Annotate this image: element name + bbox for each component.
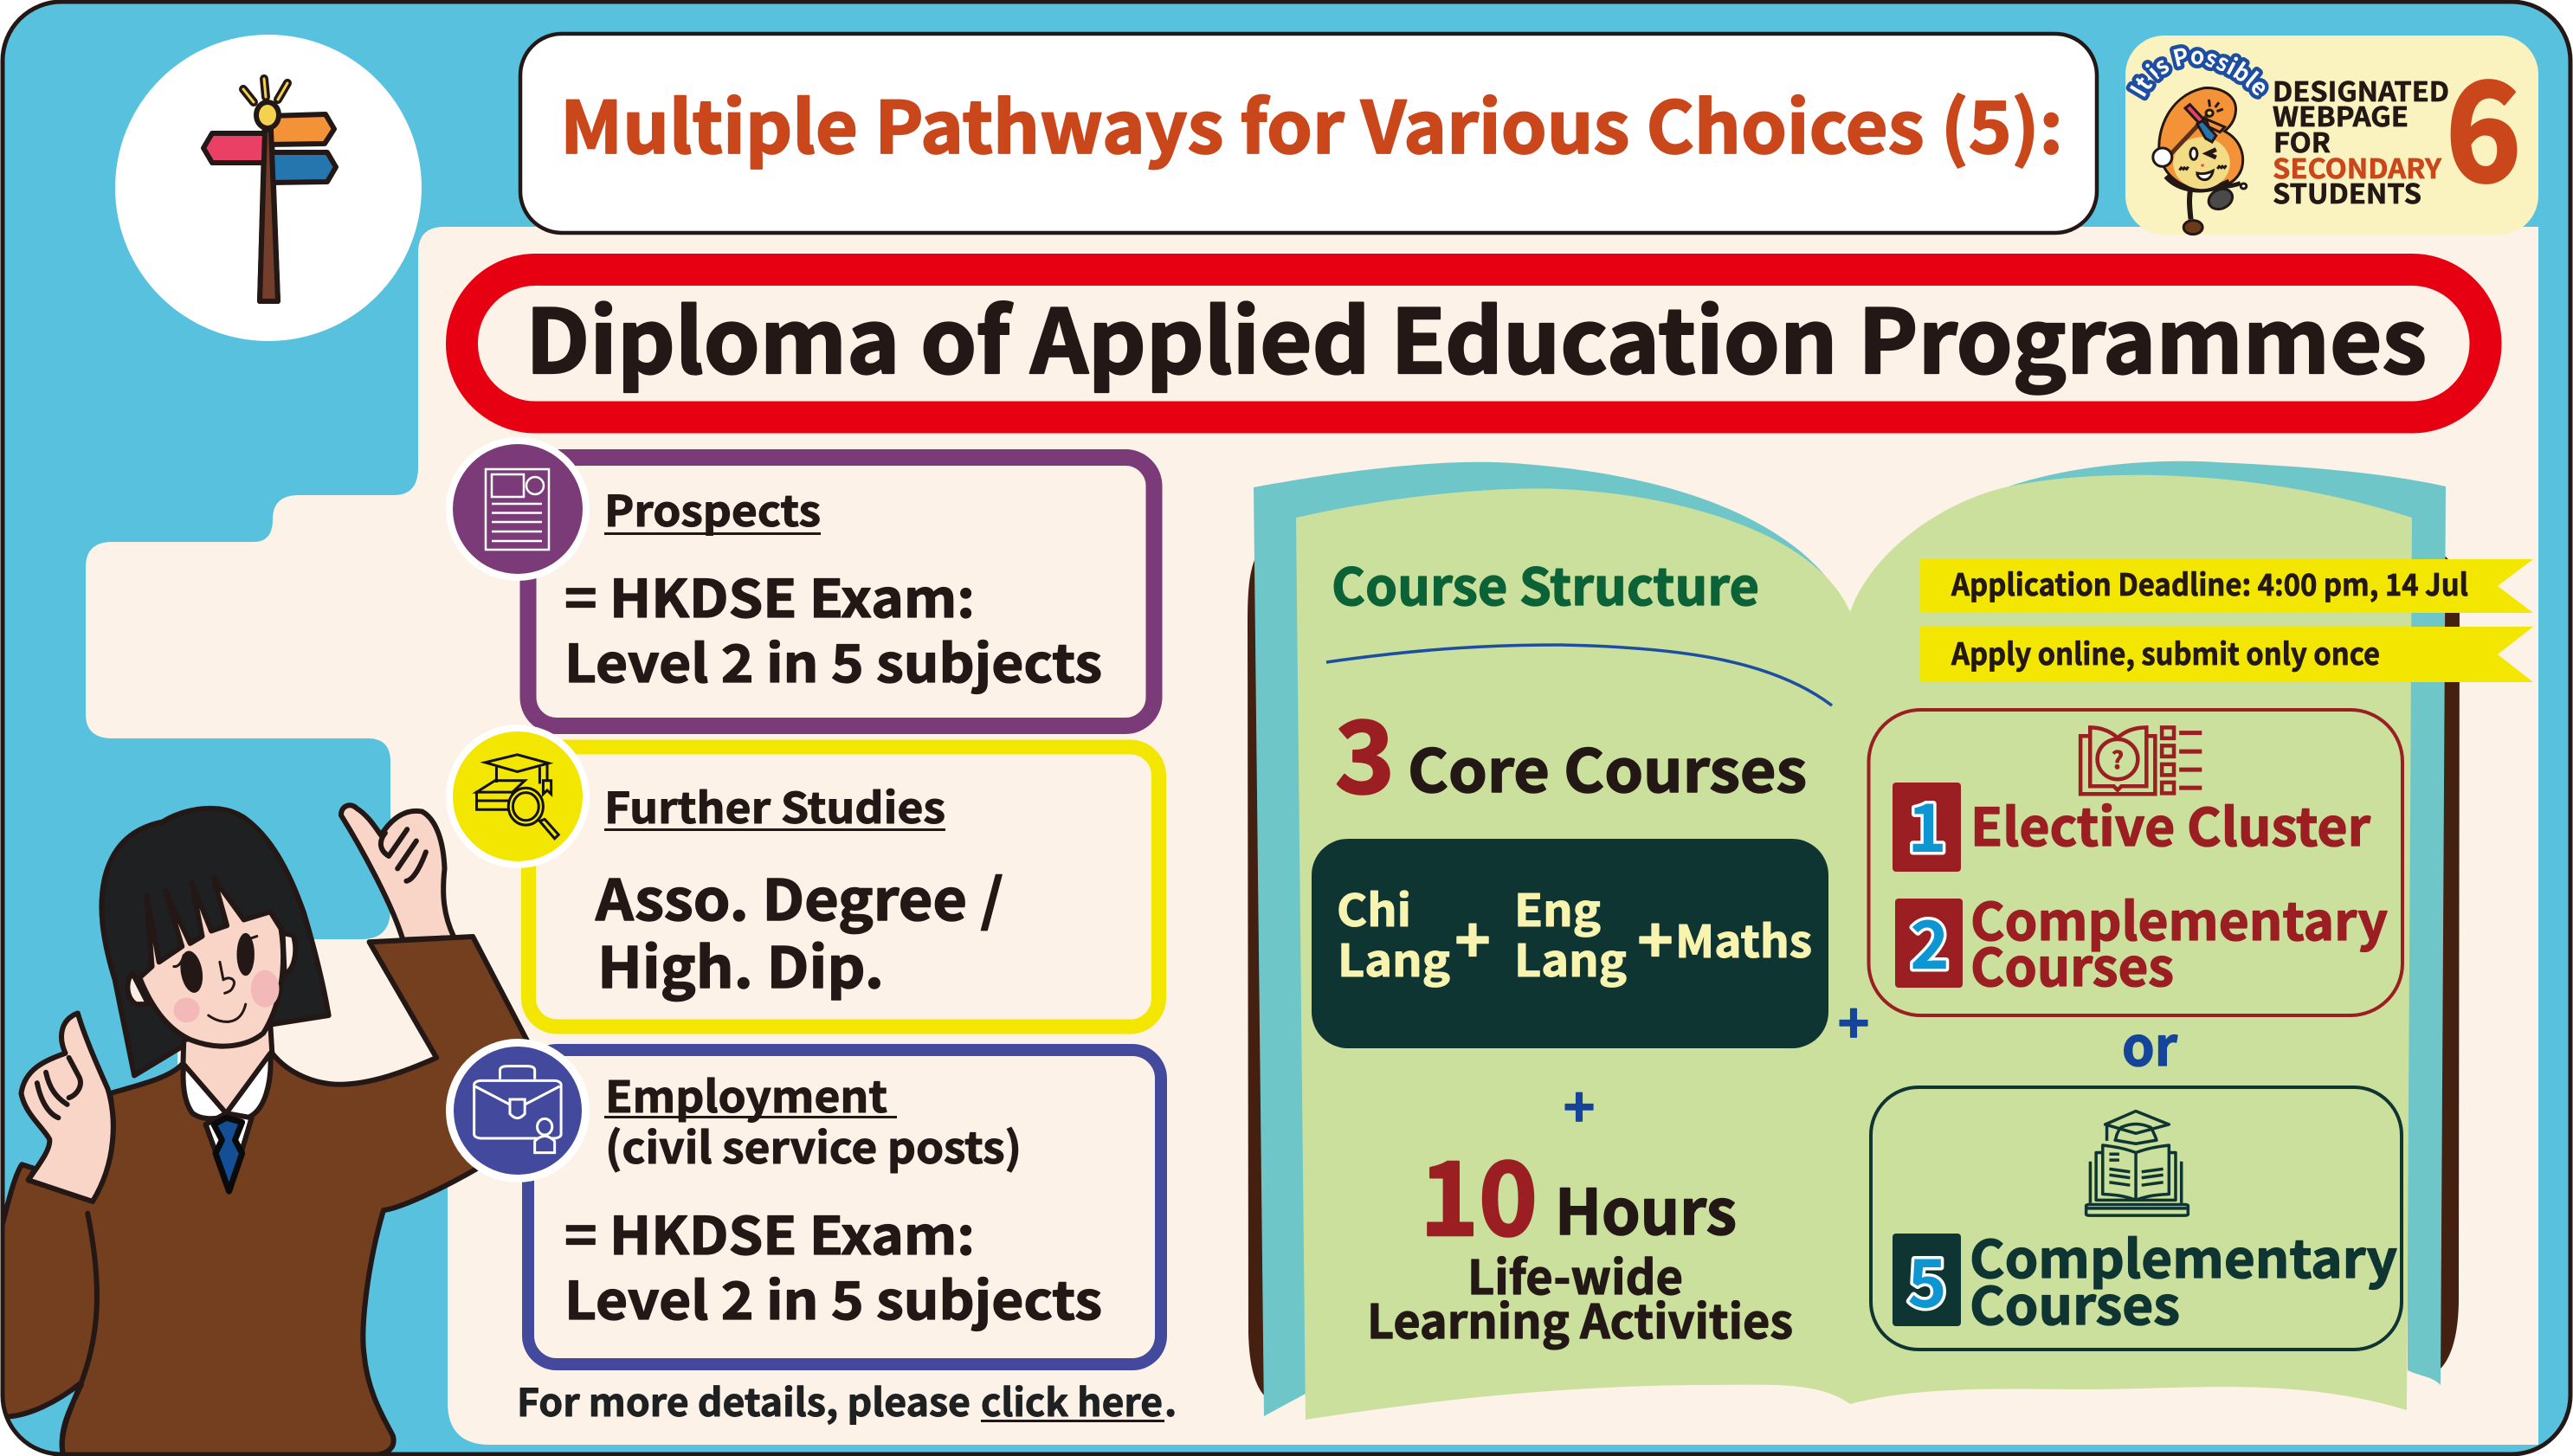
heading: course structure: Course Structure	[1332, 546, 1759, 620]
sleeve folds	[62, 1214, 97, 1455]
icon: graduation cap with magnifier	[446, 725, 590, 868]
badge text	[2273, 81, 2448, 204]
footer link note: click here	[981, 1372, 1163, 1427]
badge: two: 2	[1910, 892, 1950, 989]
heading: prospects: Prospects	[604, 478, 821, 539]
badge: five: 5	[1907, 1231, 1947, 1327]
webpage badge	[2125, 35, 2538, 235]
mascot	[2153, 87, 2247, 235]
icon: signpost in white circle	[115, 35, 422, 341]
complementary courses label	[1970, 1218, 2397, 1340]
core subjects panel	[1312, 839, 1828, 1048]
icon: document	[446, 437, 590, 581]
face and bangs	[139, 879, 283, 1047]
right hand thumb up	[341, 805, 455, 940]
further studies text: High. Dip.	[597, 923, 884, 1004]
badge: one: 1	[1907, 776, 1947, 872]
open book background	[1248, 461, 2460, 1420]
option one box	[1868, 710, 2402, 1015]
employment text: = HKDSE Exam:	[564, 1195, 975, 1270]
badge: one	[1893, 776, 1961, 872]
employment text	[564, 1195, 1102, 1335]
badge text: DESIGNATED	[2273, 70, 2449, 109]
blush	[173, 997, 200, 1022]
panel: further studies	[446, 725, 1158, 1027]
footer link note: For more details, please	[517, 1372, 971, 1427]
core courses heading: 3	[1335, 679, 1395, 822]
prospects text: Level 2 in 5 subjects	[564, 622, 1102, 698]
core subjects panel: Chi	[1337, 875, 1411, 939]
left hand fingers	[37, 1058, 81, 1118]
complementary courses label: Complementary	[1970, 1218, 2397, 1293]
prospects text	[566, 577, 1101, 694]
hair	[101, 809, 329, 1075]
badge: two	[1895, 892, 1963, 989]
core subjects panel: +	[1454, 893, 1491, 981]
core subjects panel: Lang	[1338, 925, 1450, 989]
eyes	[180, 950, 203, 993]
life-wide learning text: Learning Activities	[1367, 1284, 1793, 1352]
badge text: WEBPAGE	[2273, 95, 2409, 134]
complementary courses label	[1970, 880, 2388, 1002]
title box	[520, 34, 2097, 233]
heading: prospects	[604, 494, 821, 536]
curved divider	[1326, 645, 1832, 705]
ribbon: apply online	[1919, 627, 2533, 682]
footer link note: .	[1164, 1372, 1177, 1427]
icon: graduate with open book	[2086, 1111, 2188, 1215]
badge text: FOR	[2273, 121, 2331, 160]
option two box	[1871, 1087, 2402, 1350]
girl character	[0, 805, 537, 1455]
core courses heading	[1335, 679, 1807, 822]
panel: employment	[446, 1039, 1161, 1364]
collar	[184, 1053, 271, 1118]
further studies text	[595, 874, 1003, 1002]
main heading pill: Diploma of Applied Education Programmes	[526, 272, 2427, 399]
plus sign below: +	[1564, 1065, 1595, 1143]
prospects text: = HKDSE Exam:	[564, 557, 975, 633]
ribbon: apply online: Apply online, submit only once	[1951, 630, 2380, 674]
nose and mouth	[174, 937, 257, 1021]
further studies text: Asso. Degree /	[595, 855, 1003, 937]
core subjects panel: Eng	[1514, 875, 1601, 939]
sweater	[0, 937, 537, 1455]
mascot slogan: It is Possible	[2126, 44, 2269, 100]
ribbon: application deadline: Application Deadline: 4:00 pm, 14 Jul	[1951, 561, 2468, 605]
title box: Multiple Pathways for Various Choices (5):	[560, 70, 2063, 174]
core subjects panel: Maths	[1675, 906, 1812, 970]
icon: book with question mark and list: ?	[2112, 742, 2124, 776]
stepped cream content panel	[86, 227, 2538, 1445]
plus sign right: +	[1838, 981, 1869, 1059]
life-wide learning text: Life-wide	[1467, 1240, 1683, 1308]
core subjects panel: Lang	[1514, 925, 1627, 989]
heading: further studies	[604, 788, 945, 831]
left hand thumb up	[21, 1013, 113, 1202]
ears	[127, 933, 295, 1004]
footer link note	[517, 1372, 1177, 1427]
icon: briefcase	[446, 1039, 590, 1182]
employment text: Level 2 in 5 subjects	[564, 1260, 1102, 1335]
complementary courses label: Complementary	[1970, 880, 2388, 956]
icon: book with question mark and list	[2080, 727, 2202, 794]
panel: prospects	[446, 437, 1154, 725]
ten hours heading: Hours	[1555, 1162, 1737, 1253]
number six: 6	[2446, 23, 2521, 221]
life-wide learning text	[1367, 1240, 1793, 1352]
complementary courses label: Courses	[1970, 926, 2174, 1002]
complementary courses label: Courses	[1970, 1265, 2180, 1340]
or label: or	[2122, 1003, 2178, 1081]
right hand fingers	[381, 829, 426, 881]
heading: employment	[604, 1063, 1022, 1176]
ten hours heading: 10	[1420, 1117, 1538, 1265]
neck	[183, 1024, 272, 1118]
elective cluster label: Elective Cluster	[1970, 786, 2371, 861]
core subjects panel: +	[1637, 893, 1673, 981]
heading: employment: (civil service posts)	[605, 1114, 1022, 1176]
shirt and tie	[206, 1113, 252, 1191]
badge: five	[1893, 1231, 1961, 1327]
badge text: SECONDARY	[2273, 147, 2442, 186]
core courses heading: Core Courses	[1408, 724, 1807, 809]
ten hours heading	[1420, 1117, 1737, 1265]
heading: further studies: Further Studies	[604, 775, 945, 836]
badge text: STUDENTS	[2273, 172, 2421, 211]
heading: employment: Employment	[605, 1063, 887, 1125]
